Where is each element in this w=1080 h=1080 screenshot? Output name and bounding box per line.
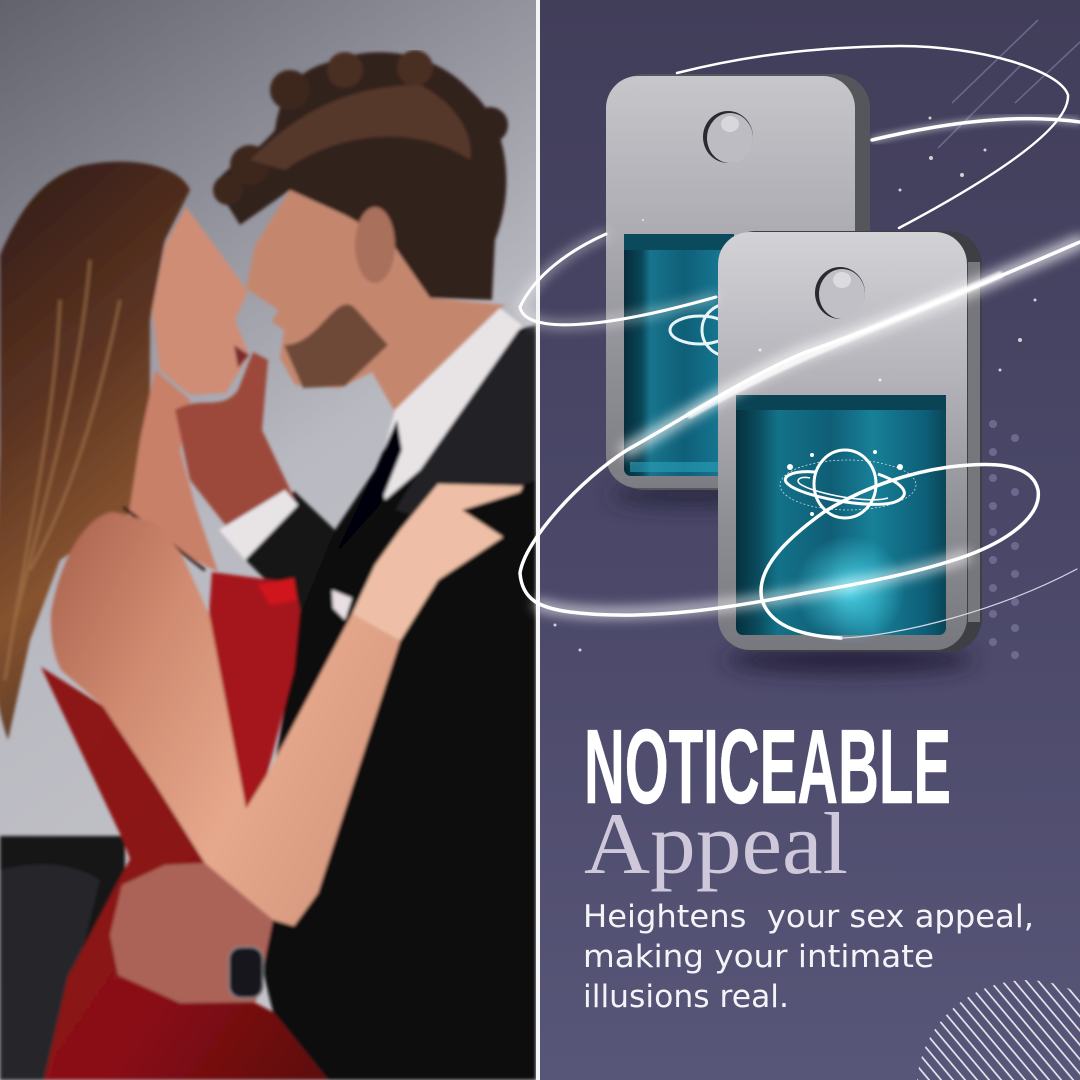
main trail bbox=[520, 242, 1080, 638]
woman's arm and torso bbox=[51, 512, 400, 926]
woman's neck and chest bbox=[128, 370, 218, 572]
pocket square bbox=[332, 590, 352, 620]
dress strap bbox=[123, 507, 205, 570]
hand on woman's face bbox=[175, 352, 295, 550]
top ellipse trail bbox=[677, 46, 1068, 228]
man's jacket shoulder bbox=[395, 325, 536, 520]
man's shirt cuff bbox=[219, 490, 298, 560]
dot grid bbox=[989, 420, 1019, 659]
man's tie bbox=[335, 420, 402, 555]
man's shirt bbox=[378, 308, 522, 500]
shadow under back bottle bbox=[610, 483, 770, 507]
panel: product background bbox=[540, 0, 1080, 1080]
glow layer bbox=[520, 234, 1080, 613]
body text: Heightens your sex appeal, bbox=[583, 899, 1034, 935]
man's suit bbox=[250, 325, 536, 1080]
icon: front perfume bottle bbox=[718, 231, 982, 652]
woman's hair strands bbox=[5, 260, 120, 680]
man's neck and face bbox=[246, 190, 505, 412]
woman's face bbox=[152, 207, 249, 395]
planet logo small marks bbox=[787, 450, 903, 516]
man's hair bbox=[213, 50, 508, 300]
heading: Appeal: Appeal bbox=[584, 796, 848, 893]
man's hand at waist bbox=[110, 863, 273, 1003]
thin outer trail bbox=[841, 569, 1077, 638]
man's ear bbox=[355, 207, 395, 283]
soft shadow under front bottle bbox=[725, 646, 975, 674]
man's beard bbox=[284, 304, 388, 388]
left loop trail bbox=[520, 234, 716, 325]
body text: making your intimate bbox=[583, 939, 934, 975]
bright streak bbox=[690, 275, 1000, 415]
watch bbox=[229, 947, 263, 998]
red dress bbox=[41, 667, 328, 1080]
sofa bbox=[0, 834, 128, 949]
body text: illusions real. bbox=[583, 979, 789, 1015]
light trail behind back bottle bbox=[872, 119, 1080, 140]
woman's hair bbox=[0, 162, 190, 740]
woman's lips bbox=[234, 345, 249, 368]
sparkles bbox=[554, 116, 1036, 652]
upper right trail bbox=[872, 119, 1080, 140]
dress front bbox=[209, 572, 300, 809]
white divider bbox=[536, 0, 540, 1080]
diagonal accent lines bbox=[938, 20, 1080, 148]
man's sleeve bbox=[239, 491, 335, 615]
hatched circle bbox=[917, 980, 1080, 1080]
woman's hand on shoulder bbox=[352, 484, 523, 641]
swirling light trails bbox=[520, 46, 1080, 638]
icon: back perfume bottle bbox=[606, 74, 870, 490]
panel: couple photo bbox=[0, 0, 536, 1080]
icon: planet logo bbox=[780, 450, 916, 518]
